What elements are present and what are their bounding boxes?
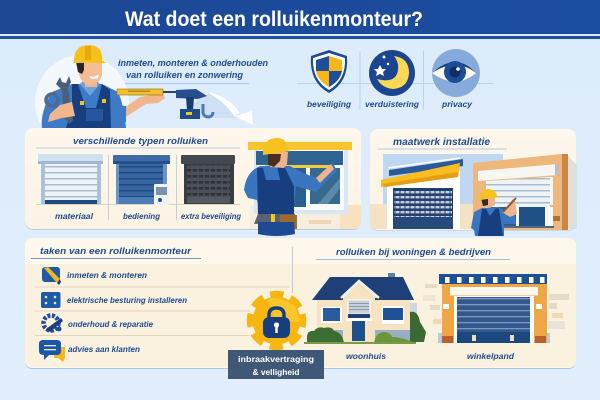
- label: inbraakvertraging & veiligheid: inbraakvertraging: [238, 354, 314, 364]
- task: advies: [39, 340, 140, 362]
- heading: taken: taken van een rolluikenmonteur: [40, 246, 192, 257]
- header banner: [0, 0, 600, 39]
- shutter: bediening with remote: [113, 155, 170, 205]
- icon: shield: [311, 50, 347, 93]
- label: beveiliging: [307, 99, 352, 109]
- heading: woningen: rolluiken bij woningen & bedrijven: [336, 247, 491, 258]
- task: onderhoud: [44, 316, 153, 332]
- icon: eye: [432, 49, 480, 97]
- heading: verschillende typen rolluiken: [73, 136, 208, 147]
- worker head: [73, 45, 106, 87]
- label: verduistering: [365, 99, 420, 109]
- label: inbraakvertraging & veiligheid: & velligheid: [252, 367, 300, 377]
- task: advies: advies aan klanten: [68, 344, 140, 354]
- task: elektrische besturing: elektrische besturing installeren: [67, 295, 187, 305]
- panel: taken en woningen: [25, 238, 576, 369]
- benefit icons row: [297, 49, 494, 110]
- shutter: extra beveiliging: [181, 155, 235, 204]
- heading: maatwerk installatie: [393, 137, 490, 148]
- icon: wrenches: [46, 76, 73, 124]
- intro text: [118, 58, 268, 84]
- worker measuring window: [244, 138, 337, 236]
- intro text: inmeten, monteren & onderhouden: [118, 58, 268, 68]
- task: elektrische besturing: [41, 292, 187, 308]
- panel: verschillende typen rolluiken: [25, 128, 361, 236]
- label: privacy: [441, 99, 473, 109]
- label: woonhuis: [346, 351, 386, 361]
- label: winkelpand: [467, 351, 515, 361]
- arrow: curved white arrow: [176, 92, 253, 125]
- worker torso: [42, 80, 126, 128]
- icon: cordless drill: [163, 89, 213, 119]
- title: Wat doet een rolluikenmonteur?: [125, 8, 423, 31]
- building with white shutter: [473, 154, 577, 230]
- house: woonhuis: [304, 273, 426, 344]
- task: inmeten: inmeten & monteren: [67, 270, 147, 280]
- shutter: materiaal: [38, 154, 103, 204]
- intro: worker with tools: [35, 45, 253, 149]
- label: extra beveiliging: [181, 212, 241, 221]
- building with awning and dark shutter: [370, 154, 510, 229]
- task: inmeten: [42, 267, 147, 285]
- gear with padlock: [246, 290, 307, 351]
- worker forearms: [48, 93, 165, 124]
- icon: moon: [369, 50, 415, 96]
- intro text: van rolluiken en zonwering: [126, 70, 243, 80]
- label: materiaal: [55, 212, 94, 221]
- panel: maatwerk installatie: [370, 129, 577, 236]
- small worker: [471, 189, 517, 236]
- label: inbraakvertraging & veiligheid: [228, 350, 324, 379]
- label: bediening: [123, 212, 160, 221]
- shop: winkelpand: [423, 274, 569, 343]
- task: onderhoud: onderhoud & reparatie: [68, 319, 153, 329]
- wall and window: [248, 142, 361, 229]
- icon: spirit level: [117, 89, 163, 95]
